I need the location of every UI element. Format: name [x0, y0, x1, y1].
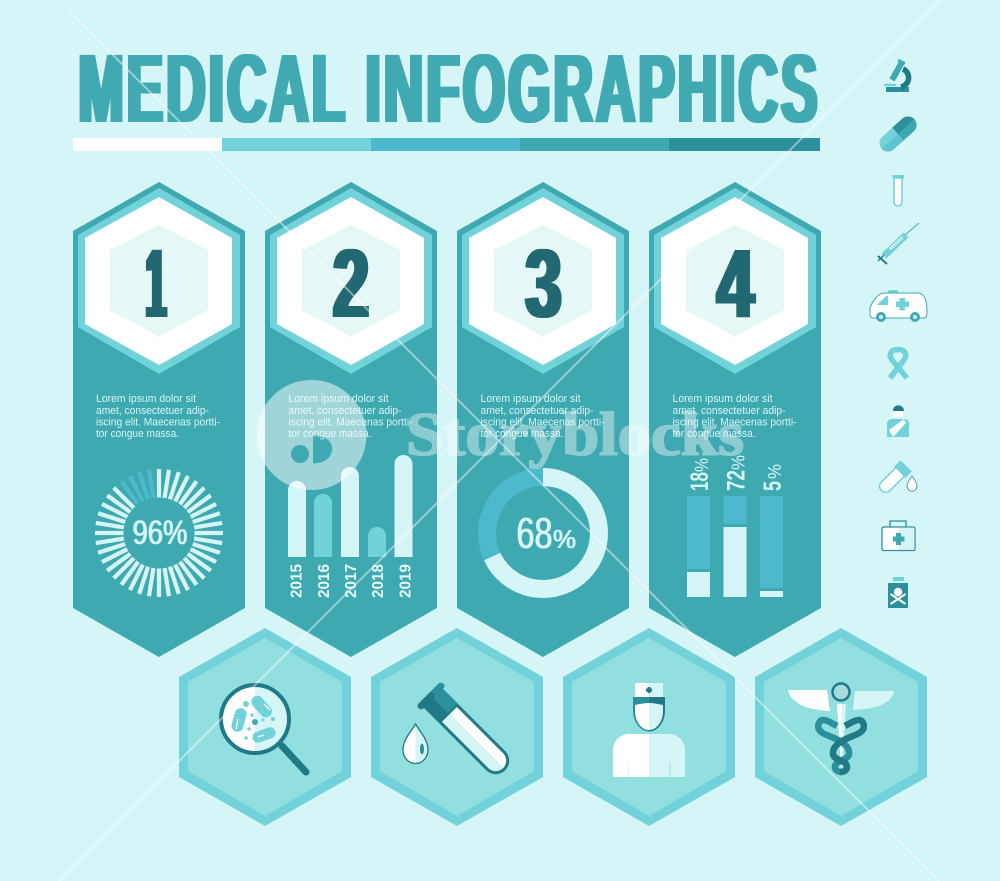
icon: tube and drop small: [876, 460, 917, 496]
panel: step 3: [457, 182, 629, 657]
text block 4: iscing elit. Maecenas portti-: [672, 416, 797, 428]
radial tick chart 96%: [95, 469, 223, 597]
panel: step 1: 1: [146, 229, 166, 338]
icon: syringe: [878, 223, 919, 264]
text block 3: Lorem ipsum dolor sit: [480, 393, 580, 405]
number 2: 2: [333, 229, 369, 338]
bar chart 2015-2019: 2017: [343, 564, 360, 598]
panel: step 1: [73, 182, 245, 657]
bar labels: 18: [686, 472, 714, 491]
panel: step 4: [649, 182, 821, 657]
text block 3: tor congue massa.: [480, 428, 564, 440]
icon: nurse: [613, 683, 685, 777]
bar labels: %: [692, 458, 712, 472]
text block 4: [672, 393, 797, 440]
text block 1: tor congue massa.: [96, 428, 179, 440]
hexagon: test tube and drop: [371, 628, 543, 826]
bar chart 2015-2019: 2015: [289, 564, 306, 598]
label 68%: 68: [516, 509, 552, 558]
bar chart 2015-2019: 2016: [316, 564, 333, 598]
title colour bar: [73, 138, 820, 151]
icon: test tube small: [892, 175, 904, 206]
icon: patient: [887, 405, 909, 437]
bar labels: %: [765, 464, 785, 479]
stacked bars 18% 72% 5%: [687, 496, 783, 597]
icon: microscope: [884, 60, 909, 92]
text block 3: amet, consectetuer adip-: [480, 405, 594, 417]
text block 2: [288, 393, 413, 440]
icon: caduceus: [788, 684, 894, 777]
text block 1: amet, consectetuer adip-: [96, 405, 209, 417]
text block 3: [480, 393, 605, 440]
text block 1: iscing elit. Maecenas portti-: [96, 416, 220, 428]
text block 2: iscing elit. Maecenas portti-: [288, 416, 413, 428]
text block 2: Lorem ipsum dolor sit: [288, 393, 388, 405]
bar labels: [686, 455, 787, 491]
text block 1: [96, 393, 220, 440]
number 3: 3: [526, 229, 562, 338]
hexagon: magnifier with bacteria: [179, 628, 351, 826]
icon: poison bottle: [888, 577, 908, 608]
icon: ribbon: [890, 350, 907, 378]
text block 4: tor congue massa.: [672, 428, 756, 440]
hexagon: caduceus: [755, 628, 927, 826]
number 4: 4: [717, 229, 754, 338]
text block 4: amet, consectetuer adip-: [672, 405, 786, 417]
label 68%: %: [553, 524, 576, 554]
text block 2: tor congue massa.: [288, 428, 372, 440]
label 96%: 96%: [132, 514, 188, 552]
bar chart 2015-2019: [288, 455, 415, 598]
donut chart 68%: [487, 477, 599, 589]
icon: pill: [876, 113, 920, 155]
text block 1: Lorem ipsum dolor sit: [96, 393, 196, 405]
icon: first aid kit: [882, 521, 915, 550]
bar labels: 5: [759, 481, 787, 491]
icon: test tube: [421, 686, 515, 780]
icon: magnifier: [221, 685, 306, 772]
text block 3: iscing elit. Maecenas portti-: [480, 416, 605, 428]
panel: step 2: [265, 182, 437, 657]
bar chart 2015-2019: 2018: [370, 564, 387, 598]
bar labels: %: [728, 455, 748, 470]
icon: ambulance: [870, 290, 927, 322]
bar labels: 72: [722, 470, 750, 491]
text block 4: Lorem ipsum dolor sit: [672, 393, 772, 405]
bar chart 2015-2019: 2019: [398, 564, 415, 598]
icon: drop: [403, 724, 428, 764]
hexagon: nurse: [563, 628, 735, 826]
text block 2: amet, consectetuer adip-: [288, 405, 402, 417]
watermark: Storyblocks: [406, 401, 744, 469]
